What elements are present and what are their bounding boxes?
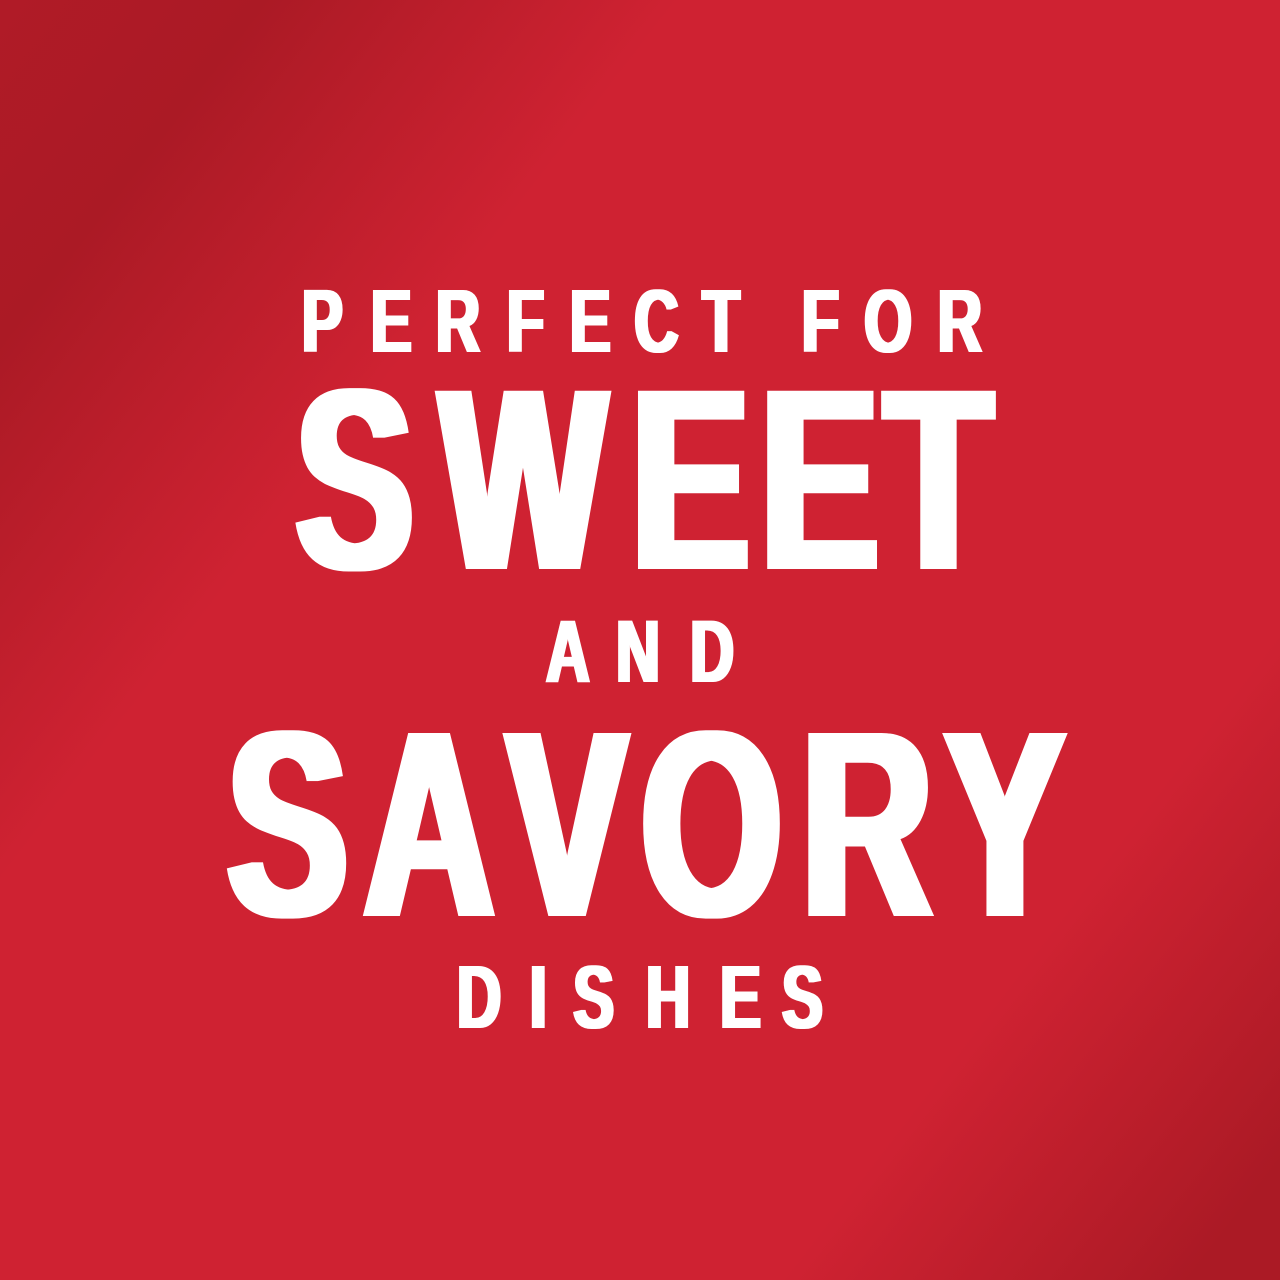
heading line: SWEET: SWEET <box>296 335 992 624</box>
heading line: AND: AND <box>546 602 734 702</box>
heading line: PERFECT FOR: PERFECT FOR <box>302 271 982 372</box>
heading line: SAVORY: SAVORY <box>227 676 1065 973</box>
heading line: DISHES: DISHES <box>457 947 823 1048</box>
